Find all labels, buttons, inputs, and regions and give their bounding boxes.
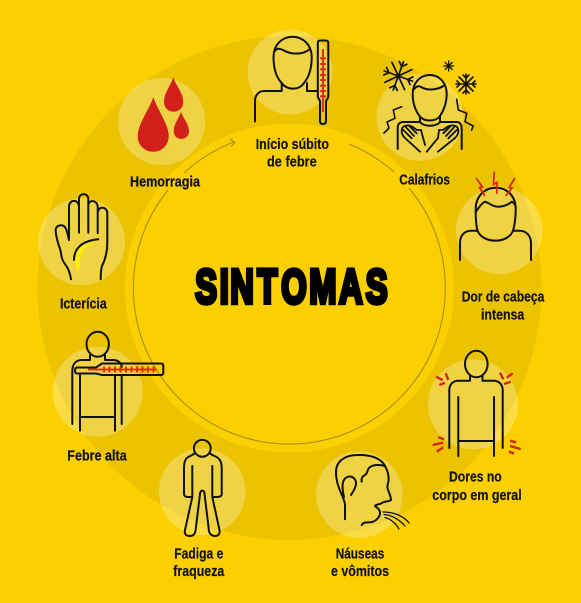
label: Dores no — [449, 469, 502, 486]
icon: shivering person — [379, 57, 476, 152]
centre disc — [125, 124, 454, 452]
symptom: início súbito de febre — [248, 30, 332, 171]
icon: yellow palm — [56, 194, 107, 279]
symptom: febre alta — [53, 332, 163, 464]
symptom: calafrios — [376, 57, 476, 188]
symptom: dor de cabeça intensa — [456, 172, 545, 323]
icon: snowflake small — [444, 61, 454, 71]
icon: snowflake large — [379, 57, 418, 95]
label: Febre alta — [67, 447, 127, 464]
title: SINTOMAS — [195, 260, 388, 313]
symptom: fadiga e fraqueza — [159, 440, 246, 580]
circular arrow — [133, 139, 445, 444]
label: Dor de cabeça — [462, 289, 545, 306]
icon: snowflake medium — [456, 74, 476, 94]
icon: body with pain — [433, 351, 521, 456]
icon: body with thermometer — [72, 332, 163, 431]
icon: head with pain — [460, 172, 531, 260]
icon: head with thermometer — [255, 37, 328, 124]
icon: red bolts — [476, 172, 515, 196]
symptom: dores no corpo em geral — [428, 351, 522, 504]
symptom: náuseas e vômitos — [316, 451, 409, 580]
icon: slumped body — [184, 440, 222, 536]
label: Náuseas — [336, 545, 384, 562]
symptom: icterícia — [38, 194, 125, 312]
icon: head vomiting — [336, 455, 409, 529]
label: Fadiga e — [174, 545, 223, 562]
symptom: hemorragia — [118, 77, 205, 191]
label line 2: corpo em geral — [432, 487, 522, 504]
icon: red pain marks — [433, 373, 521, 453]
label line 2: fraqueza — [173, 563, 225, 580]
icon: thermometer — [75, 364, 163, 375]
icon: blood drops — [138, 77, 189, 152]
label: Icterícia — [60, 295, 107, 312]
label line 2: de febre — [267, 154, 317, 171]
label: Início súbito — [256, 136, 329, 153]
label: Calafrios — [399, 171, 450, 188]
label line 2: intensa — [481, 306, 525, 323]
outer ring — [38, 36, 542, 540]
icon: shiver marks — [384, 99, 473, 133]
label: Hemorragia — [130, 174, 201, 191]
label line 2: e vômitos — [331, 563, 389, 580]
